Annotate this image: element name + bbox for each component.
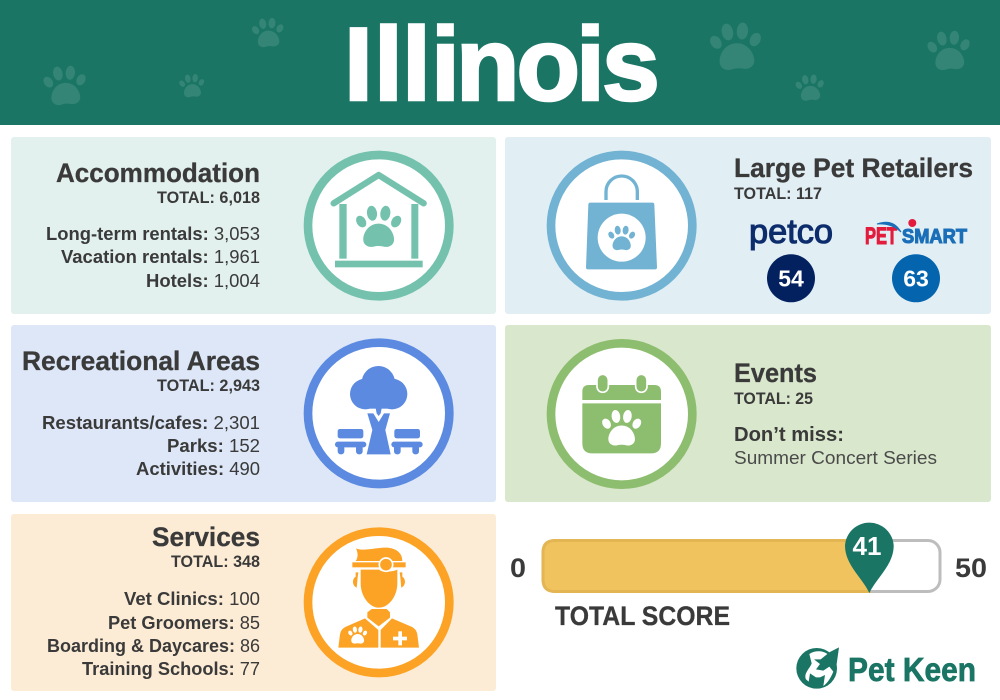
score fill (543, 540, 869, 592)
logo mark (796, 647, 839, 689)
total: accommodation: TOTAL: 6,018 (157, 189, 260, 207)
score maximum: 50 (955, 553, 987, 583)
badge: petsmart count (892, 254, 940, 302)
header banner (0, 0, 1000, 125)
heading: events: Events (734, 358, 817, 388)
score pin (845, 523, 894, 593)
score label: TOTAL SCORE (555, 601, 730, 631)
accommodation breakdown: Vacation rentals: 1,961 (61, 246, 260, 267)
panel: accommodation (11, 137, 496, 314)
heading: accommodation: Accommodation (56, 158, 260, 188)
heading: services: Services (152, 522, 260, 552)
recreational breakdown (42, 412, 260, 479)
icon: calendar (551, 343, 692, 485)
score gauge (510, 523, 987, 631)
services breakdown: Pet Groomers: 85 (108, 612, 260, 633)
title: Illinois (344, 7, 660, 123)
logo: petsmart: PET (865, 223, 897, 250)
total: retailers: TOTAL: 117 (734, 185, 822, 203)
decorative paw prints (41, 17, 973, 106)
don't miss label: Don’t miss: (734, 423, 844, 446)
badge: petsmart count: 63 (903, 266, 929, 292)
score pin: 41 (853, 531, 881, 561)
badge: petco count (767, 254, 815, 302)
recreational breakdown: Parks: 152 (167, 435, 260, 456)
total: services: TOTAL: 348 (171, 553, 260, 571)
services breakdown: Vet Clinics: 100 (124, 588, 260, 609)
icon: veterinarian (308, 532, 449, 673)
icon: shopping bag (551, 155, 692, 296)
panel: events (505, 325, 991, 502)
logo: petsmart (865, 219, 967, 250)
logo wordmark: Pet Keen (848, 651, 976, 688)
score minimum: 0 (510, 553, 526, 583)
recreational breakdown: Activities: 490 (136, 458, 260, 479)
icon: pet house (308, 155, 449, 296)
services breakdown: Boarding & Daycares: 86 (47, 635, 260, 656)
logo: petco: petco (749, 213, 833, 251)
logo: petsmart: SMART (902, 226, 967, 248)
panel: recreational areas (11, 325, 496, 502)
panel: large pet retailers (505, 137, 991, 314)
heading: large pet retailers: Large Pet Retailers (734, 153, 973, 183)
total: recreational areas: TOTAL: 2,943 (157, 377, 260, 395)
accommodation breakdown: Hotels: 1,004 (146, 270, 260, 291)
event name: Summer Concert Series (734, 447, 937, 468)
total: events: TOTAL: 25 (734, 390, 813, 408)
logo: PetKeen (796, 647, 976, 689)
recreational breakdown: Restaurants/cafes: 2,301 (42, 412, 260, 433)
services breakdown: Training Schools: 77 (82, 658, 260, 679)
icon: tree and benches (308, 343, 449, 484)
badge: petco count: 54 (778, 266, 804, 292)
panel: services (11, 514, 496, 691)
accommodation breakdown (46, 223, 260, 291)
services breakdown (47, 588, 260, 679)
heading: recreational areas: Recreational Areas (22, 346, 260, 376)
score track (543, 540, 940, 592)
accommodation breakdown: Long-term rentals: 3,053 (46, 223, 260, 244)
